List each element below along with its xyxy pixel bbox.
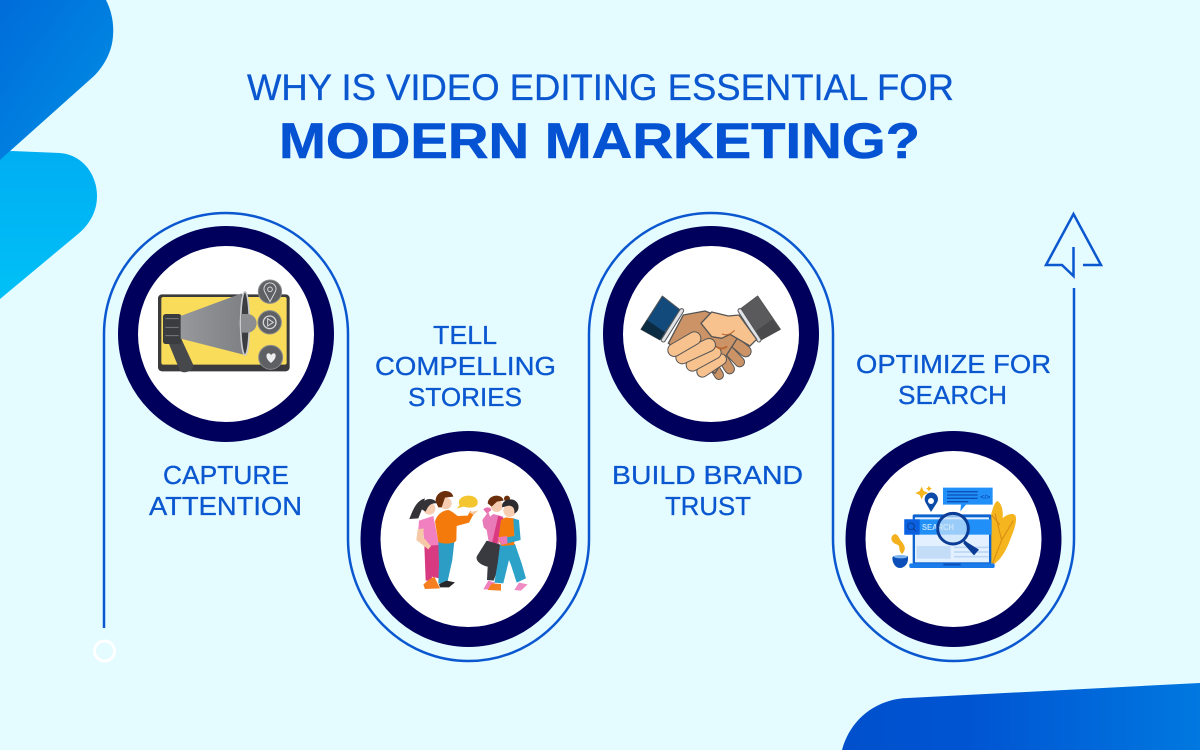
label: BUILD BRAND: [612, 460, 803, 490]
badge ring 3: [613, 236, 809, 432]
label: [856, 349, 1051, 410]
title: [247, 67, 954, 169]
title: MODERN MARKETING?: [279, 113, 920, 169]
badge ring 4: [856, 441, 1052, 637]
winding path line: [104, 213, 1074, 661]
icon: search on laptop: SEARCH: [922, 522, 954, 532]
start marker: [94, 641, 114, 661]
icon: group of people talking: [409, 491, 528, 591]
decorative blob: bottom right: [842, 683, 1200, 750]
label: [375, 320, 556, 412]
label: CAPTURE: [163, 460, 289, 490]
step 3: build brand trust: [612, 236, 809, 521]
icon: search on laptop: </>: [980, 494, 991, 501]
label: TRUST: [665, 491, 751, 521]
badge ring 2: [370, 441, 566, 637]
badge ring 1: [128, 236, 324, 432]
title: WHY IS VIDEO EDITING ESSENTIAL FOR: [247, 67, 954, 108]
arrow head: [1046, 214, 1101, 276]
label: OPTIMIZE FOR: [856, 349, 1051, 379]
icon: handshake: [641, 296, 780, 375]
decorative blob: upper left: [0, 0, 113, 160]
step 1: capture attention: [128, 236, 324, 521]
label: COMPELLING: [375, 351, 556, 381]
label: STORIES: [408, 382, 522, 412]
label: SEARCH: [898, 380, 1007, 410]
step 4: optimize for search: [856, 349, 1052, 637]
label: ATTENTION: [149, 491, 302, 521]
decorative blob: lower left: [0, 151, 97, 299]
label: [612, 460, 803, 521]
label: TELL: [433, 320, 497, 350]
step 2: tell compelling stories: [370, 320, 566, 637]
label: [149, 460, 302, 521]
icon: search on laptop: [891, 486, 1016, 568]
icon: megaphone on video screen: [158, 280, 290, 372]
